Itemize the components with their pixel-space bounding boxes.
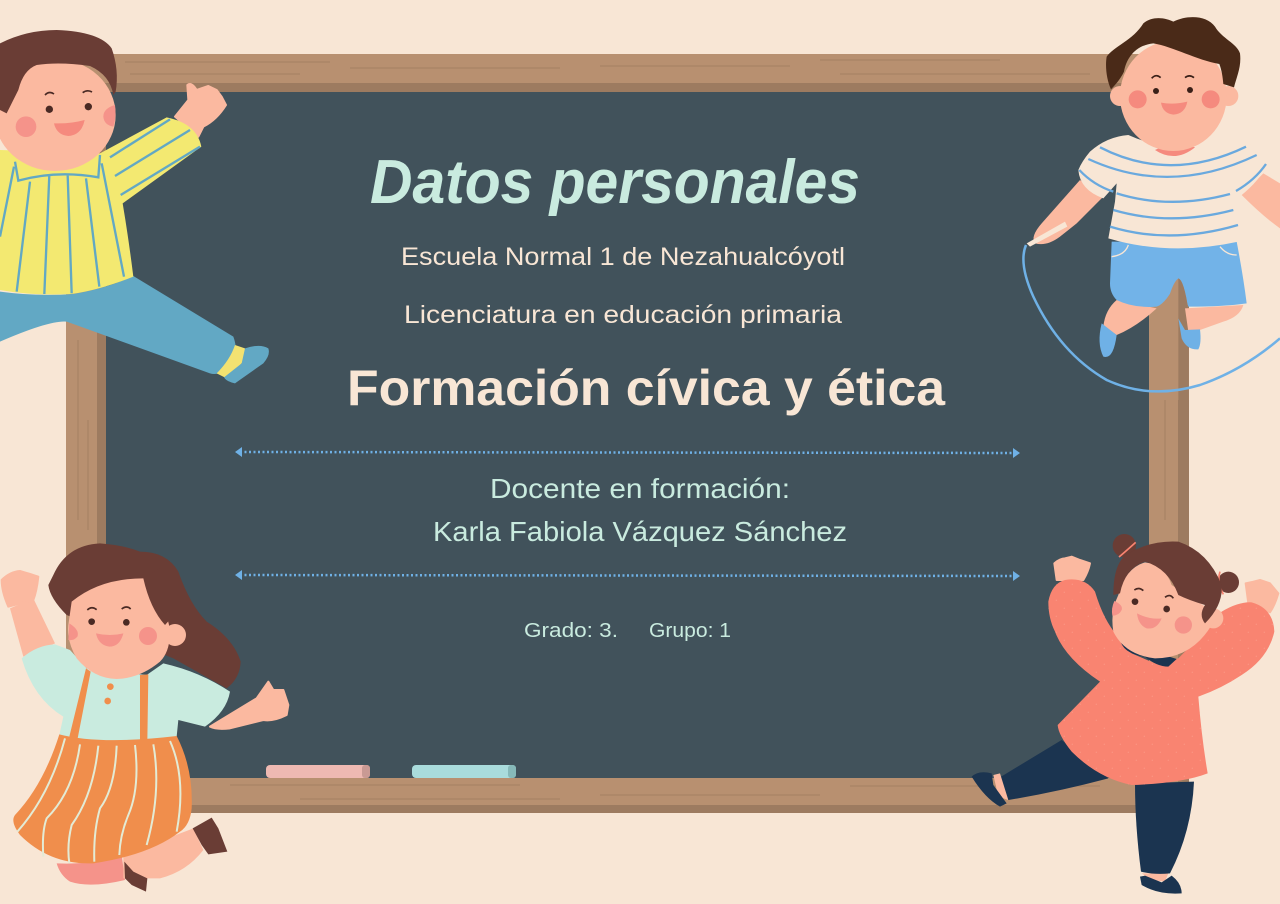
character: boy top left xyxy=(0,30,269,383)
title: Datos personales xyxy=(370,148,860,217)
chalkboard frame xyxy=(66,54,1189,813)
dotted divider bottom xyxy=(235,570,1020,581)
character: girl bottom left xyxy=(2,543,288,892)
grade and group: Grupo: 1 xyxy=(649,620,731,642)
chalk: blue xyxy=(412,765,516,778)
post tip over shorts xyxy=(1149,278,1188,400)
teacher name: Karla Fabiola Vázquez Sánchez xyxy=(433,516,847,547)
dotted divider top xyxy=(235,447,1020,458)
school name: Escuela Normal 1 de Nezahualcóyotl xyxy=(401,243,845,271)
teacher label: Docente en formación: xyxy=(490,473,790,504)
chalk: pink xyxy=(266,765,370,778)
grade and group: Grado: 3. xyxy=(524,620,618,642)
character: girl bottom right xyxy=(972,534,1278,894)
chalkboard surface xyxy=(106,92,1149,778)
character: boy top right with rope xyxy=(1023,17,1280,400)
degree: Licenciatura en educación primaria xyxy=(404,301,842,329)
subject heading: Formación cívica y ética xyxy=(347,360,946,416)
grade and group xyxy=(524,620,731,642)
